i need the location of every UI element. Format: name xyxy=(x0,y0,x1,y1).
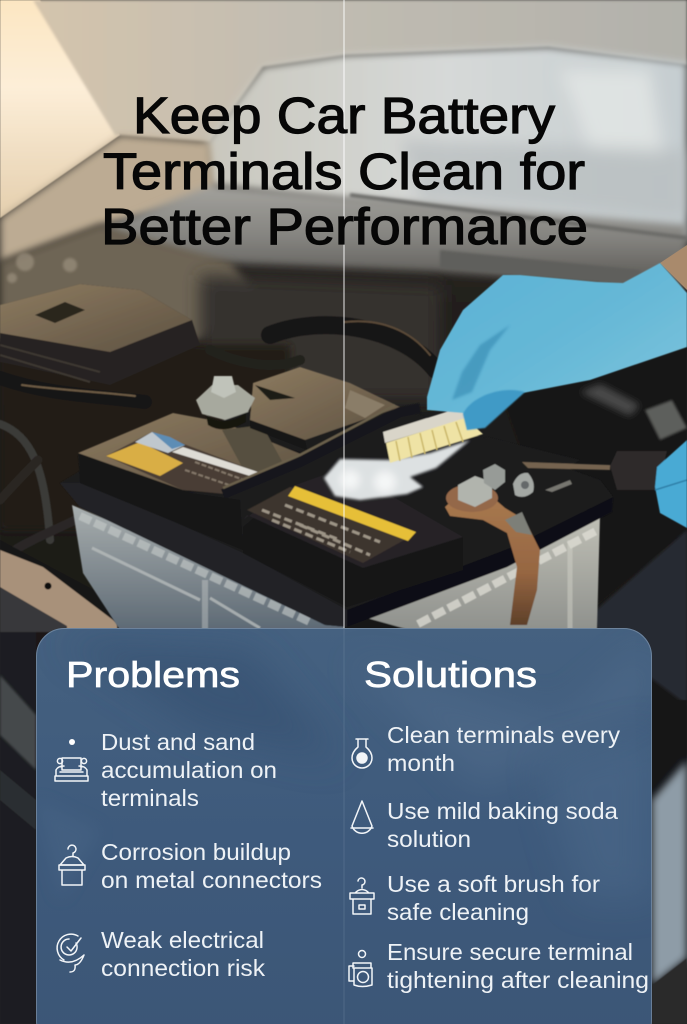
left label xyxy=(106,432,258,494)
skin: wrist xyxy=(660,245,687,290)
right terminal and rusty strap xyxy=(445,464,540,625)
lower side engine xyxy=(0,632,36,1024)
item: weak connection: connection risk xyxy=(101,955,265,981)
battery grey case, left xyxy=(72,505,345,630)
sunlit cowl left xyxy=(0,135,215,262)
item: soft brush xyxy=(350,871,600,925)
left terminal xyxy=(196,376,255,429)
item: corrosion xyxy=(59,839,322,893)
item: secure tightening xyxy=(349,939,649,993)
hoses and cables xyxy=(0,321,436,550)
foam xyxy=(324,440,470,500)
sunlit sky corner xyxy=(0,0,120,218)
vertical divider line xyxy=(343,0,345,628)
open hood underside xyxy=(33,0,687,142)
icon: jar with bubbles xyxy=(349,950,372,986)
item: baking soda: solution xyxy=(387,826,471,852)
item: clean monthly: month xyxy=(387,750,455,776)
black ridge xyxy=(223,408,420,494)
left fender xyxy=(0,540,163,632)
item: dust and sand: accumulation on xyxy=(101,757,277,783)
battery black lid xyxy=(60,395,613,627)
icon: container with hook xyxy=(350,878,374,914)
left raised cover xyxy=(78,413,303,523)
item: dust and sand xyxy=(55,729,277,811)
panel blurred reflections xyxy=(36,628,652,1024)
battery grey case, right xyxy=(345,515,600,630)
item: baking soda xyxy=(351,798,619,852)
metal tool xyxy=(522,451,667,490)
icon: water drop xyxy=(351,801,373,833)
item: weak connection xyxy=(57,927,265,981)
upper left bay xyxy=(0,225,260,340)
item: clean monthly xyxy=(352,722,620,776)
dark parts right xyxy=(500,345,687,610)
right tray xyxy=(417,437,613,530)
battery xyxy=(60,263,687,630)
icon: round flask xyxy=(352,739,372,768)
item: corrosion: on metal connectors xyxy=(101,867,322,893)
engine cover box xyxy=(0,284,200,385)
heading: problems: Problems xyxy=(66,654,240,695)
title xyxy=(101,87,588,255)
item: corrosion: Corrosion buildup xyxy=(101,839,291,865)
right dark box xyxy=(593,530,687,705)
right raised cover xyxy=(243,468,463,607)
glass info panel xyxy=(36,628,652,1024)
soft brush xyxy=(383,406,483,463)
heading: solutions: Solutions xyxy=(364,654,537,695)
item: weak connection: Weak electrical xyxy=(101,927,264,953)
item: dust and sand: Dust and sand xyxy=(101,729,255,755)
panel: problems xyxy=(55,654,322,981)
title: Keep Car Battery xyxy=(133,87,556,144)
item: secure tightening: Ensure secure terminal xyxy=(387,939,633,965)
panel: solutions xyxy=(349,654,649,993)
icon: dust on battery xyxy=(55,739,88,781)
icon: checkmark circle xyxy=(57,934,84,972)
item: dust and sand: terminals xyxy=(101,785,199,811)
item: baking soda: Use mild baking soda xyxy=(387,798,619,824)
blue gloves xyxy=(427,263,687,528)
item: soft brush: Use a soft brush for xyxy=(387,871,600,897)
title: Better Performance xyxy=(101,198,588,255)
icon: corrosion container xyxy=(59,845,85,885)
bay shadow xyxy=(200,275,440,400)
item: soft brush: safe cleaning xyxy=(387,899,529,925)
windshield reflections xyxy=(400,70,687,220)
item: secure tightening: tightening after cleaning xyxy=(387,967,649,993)
item: clean monthly: Clean terminals every xyxy=(387,722,620,748)
wiper cowl strip xyxy=(100,185,687,290)
upper tray xyxy=(250,367,400,450)
title: Terminals Clean for xyxy=(103,143,585,200)
windshield xyxy=(205,47,687,240)
fingers shading xyxy=(452,325,510,400)
